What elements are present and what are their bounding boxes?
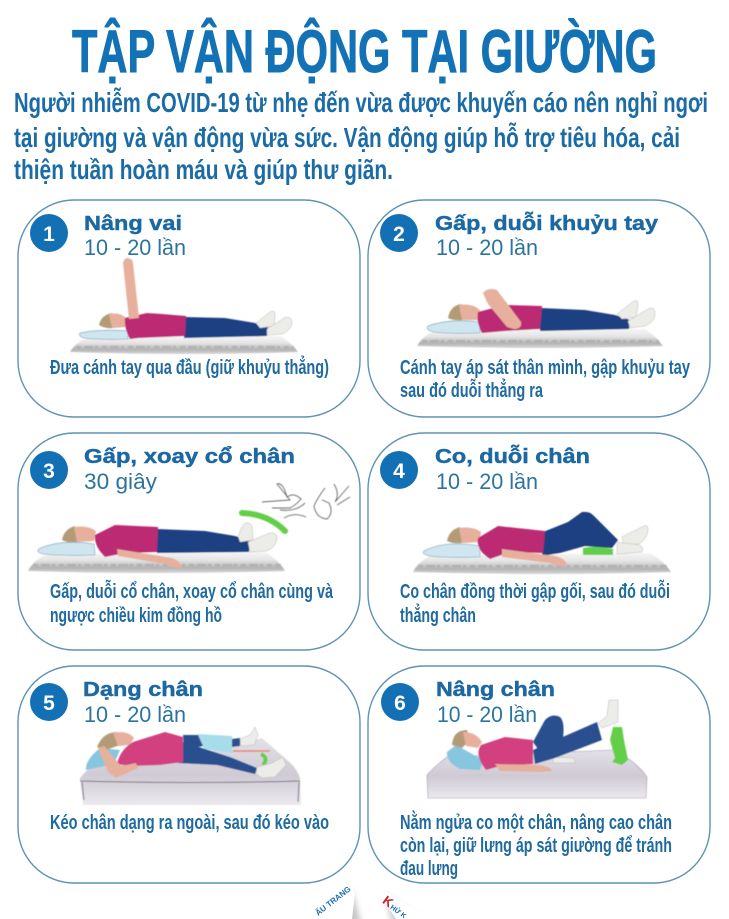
description 4	[400, 579, 670, 627]
repetitions 4: 10 - 20 lần	[436, 469, 538, 494]
description 2	[400, 357, 691, 402]
foot motion sketches	[262, 484, 350, 519]
illustration 4	[413, 512, 671, 574]
illustration 5	[80, 727, 301, 805]
description 6: đau lưng	[400, 858, 458, 880]
panel: exercise 2	[368, 200, 710, 417]
description 3	[50, 579, 334, 627]
heading 5: Dạng chân	[83, 678, 203, 701]
description 2: sau đó duỗi thẳng ra	[400, 378, 544, 402]
heading 3: Gấp, xoay cổ chân	[84, 445, 295, 468]
number badge 2	[380, 214, 418, 252]
heading 6: Nâng chân	[436, 678, 555, 701]
description 3: ngược chiều kim đồng hồ	[50, 605, 222, 627]
panel: exercise 4	[368, 433, 710, 650]
illustration 3	[28, 484, 350, 573]
heading 1: Nâng vai	[84, 212, 182, 235]
number badge 5	[30, 683, 68, 721]
green double arrow	[610, 727, 628, 765]
number badge 3	[30, 451, 68, 489]
illustration 1	[70, 258, 298, 354]
duration 3: 30 giây	[84, 469, 158, 494]
description 5: Kéo chân dạng ra ngoài, sau đó kéo vào	[50, 812, 329, 834]
intro text	[14, 87, 708, 185]
heading 2: Gấp, duỗi khuỷu tay	[435, 211, 659, 235]
description 3: Gấp, duỗi cổ chân, xoay cổ chân cùng và	[50, 579, 334, 603]
number badge 4	[380, 451, 418, 489]
intro text: thiện tuần hoàn máu và giúp thư giãn.	[14, 154, 393, 185]
illustration 6	[427, 700, 647, 798]
illustration 2	[417, 289, 663, 348]
packet label right	[380, 893, 411, 919]
description 4: thẳng chân	[400, 603, 476, 627]
number badge 5: 5	[43, 692, 55, 715]
panel: exercise 3	[18, 433, 360, 650]
repetitions 6: 10 - 20 lần	[437, 702, 537, 727]
description 1: Đưa cánh tay qua đầu (giữ khuỷu thẳng)	[50, 355, 329, 379]
packet label left: ẤU TRANG	[313, 884, 353, 918]
number badge 2: 2	[393, 223, 405, 246]
number badge 1: 1	[43, 223, 55, 246]
packet label right: K	[380, 893, 397, 911]
panel: exercise 6	[368, 666, 710, 883]
green motion arc	[242, 513, 285, 531]
description 6	[400, 810, 672, 880]
mask packet corners at page bottom	[300, 884, 430, 919]
heading 4: Co, duỗi chân	[435, 444, 590, 468]
number badge 6	[381, 683, 419, 721]
panel: exercise 5	[18, 666, 360, 883]
repetitions 1: 10 - 20 lần	[84, 235, 186, 260]
repetitions 5: 10 - 20 lần	[84, 702, 186, 727]
number badge 1	[30, 214, 68, 252]
repetitions 2: 10 - 20 lần	[436, 235, 538, 260]
number badge 3: 3	[43, 460, 55, 483]
number badge 6: 6	[394, 692, 406, 715]
panel: exercise 1	[18, 200, 360, 417]
number badge 4: 4	[393, 460, 405, 483]
